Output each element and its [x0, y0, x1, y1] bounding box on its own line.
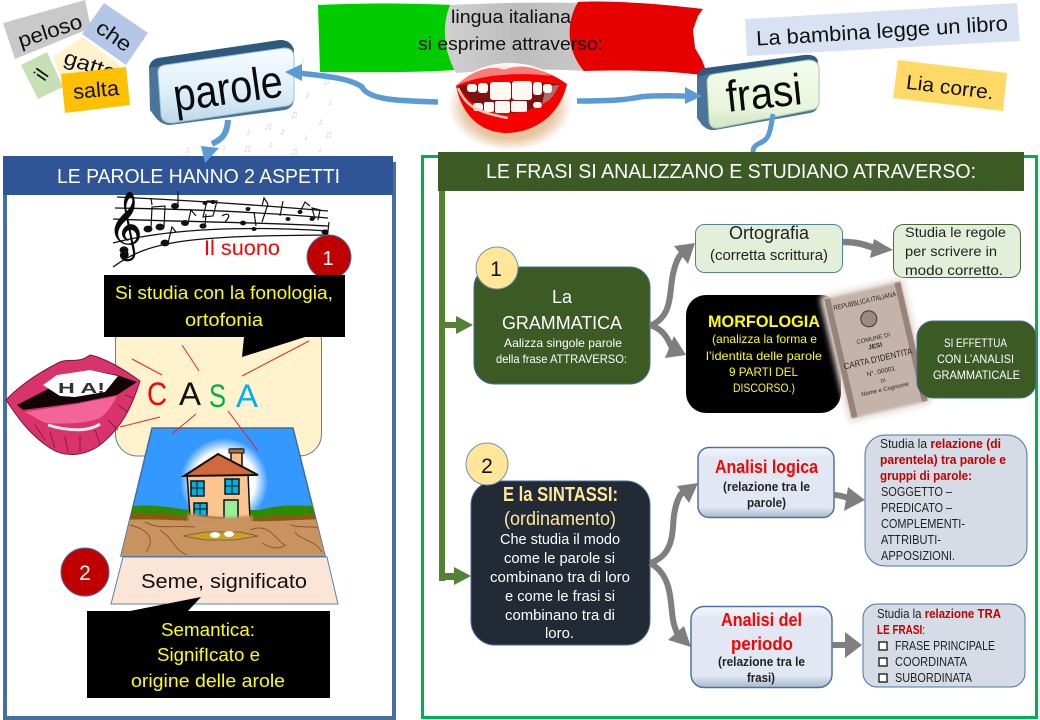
box: relazione tra frasi [863, 604, 1025, 687]
badge: number 1 [307, 235, 351, 279]
box: relazione tra parole: parentela) tra parole e [880, 452, 1006, 467]
box: analisi logica [698, 448, 834, 518]
word CASA: A [236, 378, 259, 414]
arrow: sintassi to analisi logica [650, 483, 698, 563]
word tiles cluster [3, 0, 148, 113]
arrow: analisi del periodo to relazione [832, 632, 862, 658]
scattered music notes background: ♫ [322, 76, 330, 88]
box: relazione tra parole: gruppi di parole: [880, 468, 972, 483]
key button: frasi: frasi [723, 65, 804, 122]
arrow: mouth to parole [285, 64, 438, 102]
panel: le frasi [422, 152, 1036, 718]
word tile: il: il [30, 65, 54, 85]
box: relazione tra parole: PREDICATO – [881, 500, 953, 515]
callout: semantica: SignifIcato e [157, 645, 260, 665]
word tile: salta: salta [72, 77, 120, 104]
badge: yellow 1 [476, 247, 518, 289]
word tile: gatto: gatto [61, 46, 119, 85]
box: analisi del periodo: frasi) [747, 671, 775, 685]
meaning label: Seme, significato [111, 557, 338, 604]
icon: open mouth HA: H A! [58, 380, 105, 397]
callout: semantica: origine delle arole [131, 671, 285, 691]
box: morfologia [686, 277, 933, 423]
box: analisi del periodo [691, 606, 832, 688]
box: relazione tra parole: APPOSIZIONI. [881, 548, 955, 563]
box: la sintassi: E la SINTASSI: [503, 484, 618, 506]
scattered music notes background: ♪ [268, 139, 274, 151]
box: la sintassi: loro. [545, 625, 574, 642]
arrow: ortografia to regole [843, 239, 893, 258]
left panel heading [3, 156, 393, 195]
box: la grammatica: della frase ATTRAVERSO: [496, 352, 627, 366]
box: regole di scrittura [894, 224, 1020, 278]
box: relazione tra parole: COMPLEMENTI- [881, 516, 965, 531]
arrow: frasi to right panel [753, 114, 773, 153]
panel: le parole [3, 156, 394, 718]
icon: carta d'identita: DI [880, 378, 886, 385]
badge: yellow 2: 2 [481, 455, 493, 478]
word CASA: S [209, 378, 226, 414]
box: analisi logica: Analisi logica [715, 457, 819, 477]
icon: music staff: 𝄞 [108, 192, 142, 261]
sentence tile: Lia corre: Lia corre. [905, 72, 995, 104]
box: relazione tra frasi: LE FRASI: [877, 623, 925, 637]
key button: parole: parole [170, 55, 286, 121]
box: ortografia: Ortografia [729, 223, 810, 243]
box: relazione tra parole: SOGGETTO – [881, 484, 953, 499]
box: la grammatica: GRAMMATICA [502, 313, 622, 333]
callout: semantica [87, 597, 330, 698]
box: la sintassi: combinano tra di loro [490, 569, 630, 586]
box: la grammatica: Aalizza singole parole [504, 336, 622, 350]
right panel border [422, 156, 1036, 718]
scattered music notes background: ♪ [305, 89, 310, 101]
box: la grammatica [474, 267, 650, 384]
sentence tile: La bambina legge un libro [745, 3, 1020, 56]
badge: number 2: 2 [79, 562, 91, 585]
right panel heading: LE FRASI SI ANALIZZANO E STUDIANO ATRAVERSO: [486, 161, 976, 183]
flag caption [418, 7, 603, 54]
box: relazione tra frasi: FRASE PRINCIPALE [895, 639, 995, 653]
red caption: Il suono: Il suono [204, 237, 280, 260]
scattered music notes background: ♫ [290, 146, 298, 158]
scattered music notes background [185, 56, 339, 158]
box: analisi del periodo: Analisi del [721, 610, 802, 630]
box: morfologia: 9 PARTI DEL [729, 365, 798, 379]
badge: number 1: 1 [322, 248, 334, 270]
box: la sintassi [471, 481, 650, 645]
badge: yellow 2 [466, 443, 508, 485]
badge: number 2 [61, 548, 109, 596]
word tile: che [82, 3, 148, 65]
scattered music notes background: ♪ [280, 126, 286, 138]
box: analisi grammaticale: SI EFFETTUA [944, 338, 1007, 350]
box: morfologia: (analizza la forma e [712, 332, 817, 346]
icon: music staff [108, 191, 329, 267]
icon: carta d'identita: REPUBBLICA ITALIANA [833, 291, 897, 312]
box: morfologia: l’identita delle parole [706, 349, 822, 363]
box: ortografia [696, 223, 842, 272]
box: regole di scrittura: per scrivere in [905, 243, 997, 259]
box: relazione tra frasi: SUBORDINATA [895, 671, 973, 685]
box: la grammatica: La [552, 287, 573, 307]
scattered music notes background: ♫ [324, 129, 332, 141]
box: la sintassi: Che studia il modo [500, 531, 620, 548]
box: regole di scrittura: Studia le regole [905, 224, 1006, 240]
icon: smiling red lips [448, 63, 572, 151]
flag caption: lingua italiana [451, 7, 572, 27]
scattered music notes background: ♪ [318, 116, 324, 128]
box: morfologia: MORFOLOGIA [708, 312, 820, 331]
scattered music notes background: ♫ [243, 143, 251, 155]
left panel heading: LE PAROLE HANNO 2 ASPETTI [57, 166, 340, 188]
box: ortografia: (corretta scrittura) [710, 247, 828, 264]
radiating sound lines [120, 341, 309, 451]
box: relazione tra frasi: COORDINATA [895, 655, 968, 669]
icon: carta d'identita: N°. 00001 [866, 364, 896, 379]
badge: yellow 1: 1 [490, 258, 502, 281]
meaning label: Seme, significato: Seme, significato [141, 571, 307, 593]
box: relazione tra parole [865, 435, 1027, 566]
box: la sintassi: combinano tra di [505, 607, 615, 624]
word CASA: A [179, 376, 202, 412]
arrow: grammatica to ortografia [650, 243, 695, 326]
word tile: peloso: peloso [15, 10, 85, 53]
panel: cream sound box [116, 318, 322, 456]
callout: fonologia [104, 275, 345, 357]
scattered music notes background: ♩ [222, 141, 233, 153]
sentence tile: Lia corre [893, 60, 1007, 111]
box: la sintassi: (ordinamento) [504, 509, 616, 530]
arrow: analisi logica to relazione [834, 487, 865, 511]
arrow: parole to left panel [201, 120, 228, 163]
arrow: mouth to frasi [577, 87, 702, 104]
left panel border [5, 164, 394, 718]
callout: fonologia: ortofonia [185, 310, 264, 330]
scattered music notes background: ♪ [300, 56, 306, 68]
arrow: sintassi to analisi del periodo [650, 563, 691, 647]
word tile: che: che [92, 16, 136, 57]
box: analisi del periodo: periodo [731, 634, 793, 654]
scattered music notes background: ♪ [246, 126, 252, 138]
right panel heading [438, 152, 1024, 191]
word tile: gatto [53, 37, 124, 85]
box: analisi del periodo: (relazione tra le [718, 655, 805, 669]
box: analisi logica: (relazione tra le [723, 480, 810, 494]
icon: carta d'identita: Nome e Cognome [861, 381, 910, 398]
box: la sintassi: come le parole si [504, 550, 615, 567]
arrow: grammatica to morfologia [650, 325, 686, 358]
icon: carta d'identita: COMUNE DI [856, 332, 891, 346]
icon: house picture [120, 428, 326, 556]
icon: carta d'identita: CARTA D'IDENTITA [843, 346, 913, 372]
flag caption: si esprime attraverso: [418, 34, 603, 54]
word CASA [147, 376, 259, 414]
box: la sintassi: e come le frasi si [505, 588, 615, 605]
box: analisi logica: parole) [747, 496, 786, 510]
scattered music notes background: ♩ [304, 131, 315, 143]
box: relazione tra parole: ATTRIBUTI- [881, 532, 941, 547]
icon: carta d'identita: JESI [868, 342, 883, 352]
box: relazione tra parole: Studia la relazione (di [880, 436, 1001, 451]
word tile: salta [61, 67, 130, 113]
icon: open mouth HA [6, 355, 140, 454]
box: analisi grammaticale: CON L’ANALISI [937, 354, 1014, 366]
box: morfologia: DISCORSO.) [733, 381, 795, 395]
key button: parole [149, 40, 294, 125]
key button: frasi [697, 55, 819, 130]
icon: carta d'identita [819, 277, 933, 423]
word CASA: C [147, 376, 167, 412]
scattered music notes background: ♫ [290, 109, 298, 121]
callout: semantica: Semantica: [161, 620, 255, 640]
box: analisi grammaticale: GRAMMATICALE [933, 370, 1020, 382]
scattered music notes background: ♩ [318, 143, 329, 155]
scattered music notes background: ♪ [185, 144, 190, 156]
box: regole di scrittura: modo corretto. [905, 262, 1003, 278]
word tile: peloso [3, 0, 91, 59]
scattered music notes background: ♩ [328, 96, 339, 108]
scattered music notes background: ♫ [264, 121, 272, 133]
box: relazione tra frasi: Studia la relazione TRA [877, 607, 1001, 621]
callout: fonologia: Si studia con la fonologia, [115, 283, 333, 303]
sentence tile: La bambina legge un libro: La bambina legge un libro [756, 12, 1008, 51]
flag: italian tricolour banner [318, 1, 708, 76]
box: analisi grammaticale [917, 321, 1036, 398]
green bracket connector with arrows [439, 191, 473, 585]
word tile: il [21, 52, 63, 99]
